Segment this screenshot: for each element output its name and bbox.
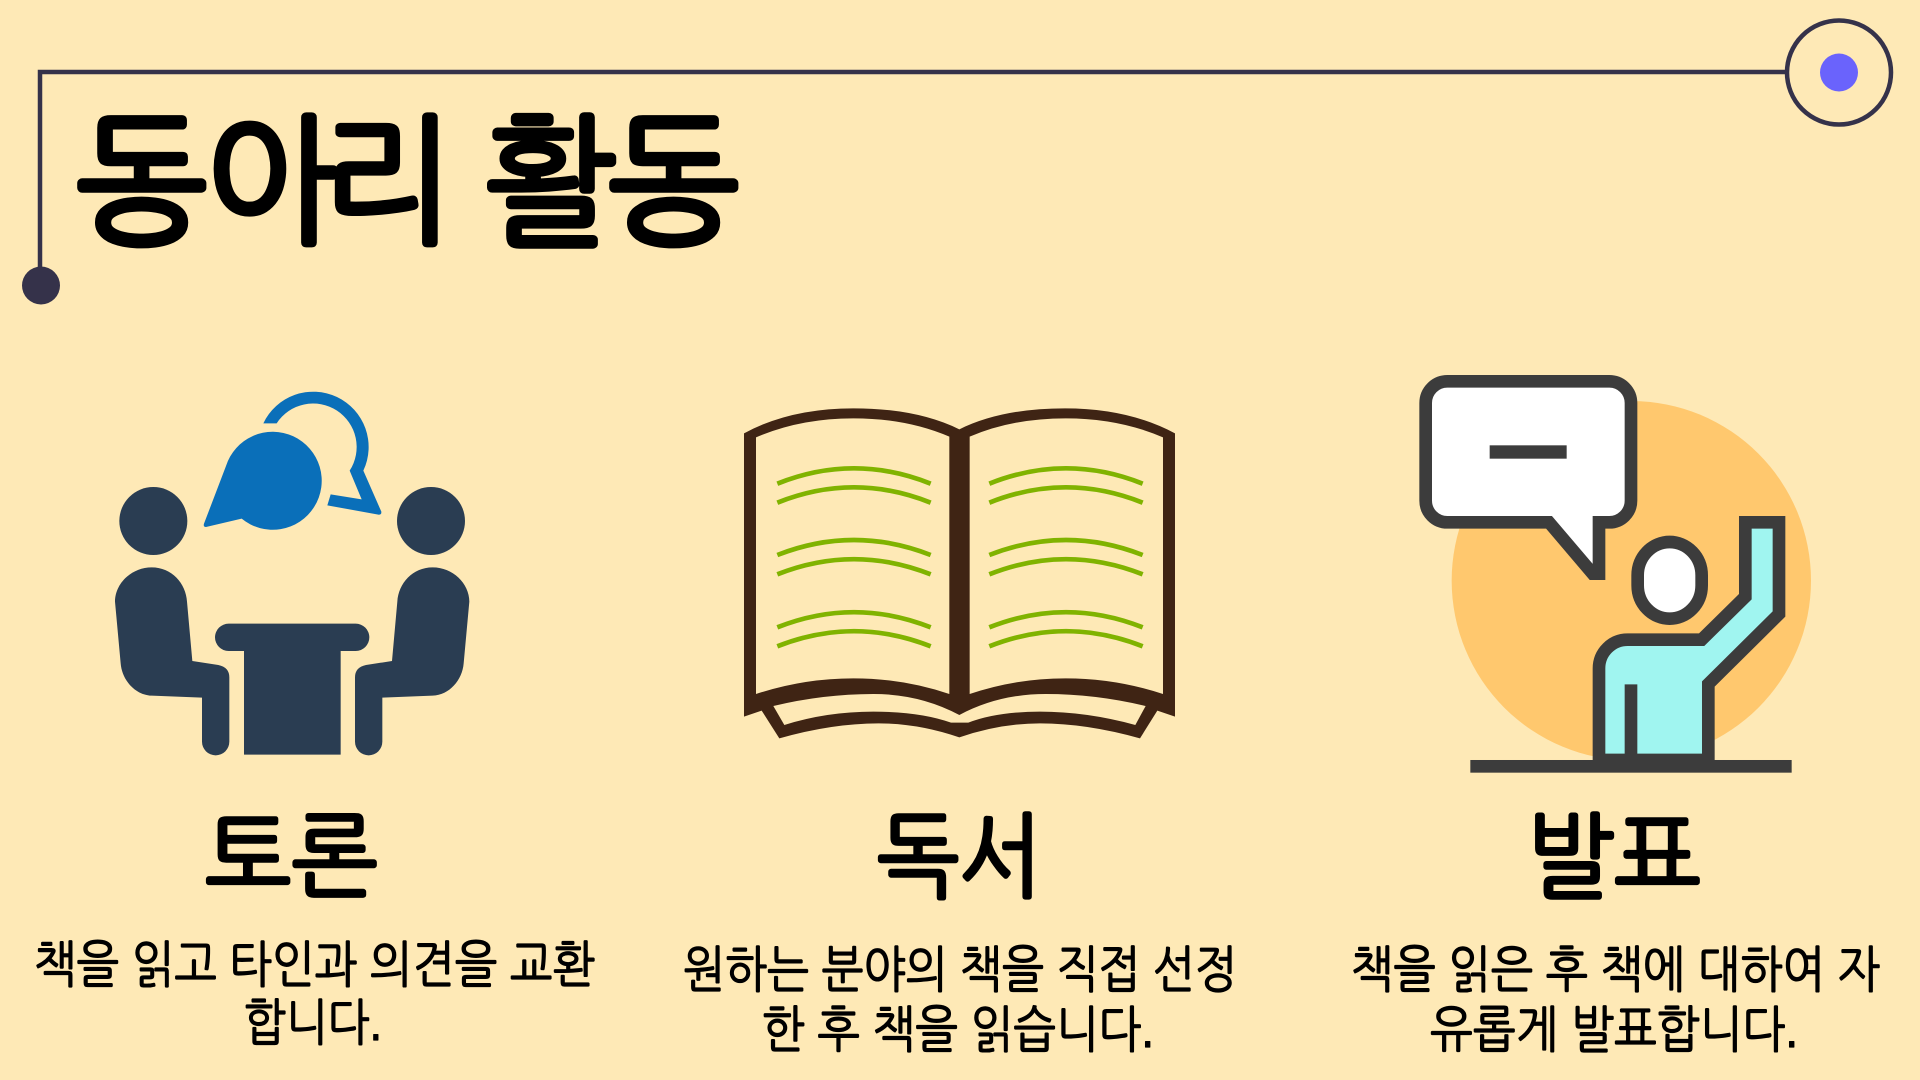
icon: discussion at table — [115, 392, 469, 755]
description: reading: 원하는 분야의 책을 직접 선정 — [683, 942, 1237, 998]
description: discussion: 합니다. — [244, 995, 382, 1051]
icon part: solid speech bubble — [204, 432, 322, 530]
description: presentation: 유롭게 발표합니다. — [1430, 1002, 1798, 1058]
icon: target circle top right — [1787, 20, 1891, 124]
icon part: ground bar — [1470, 760, 1792, 773]
icon part: orange circle — [1452, 401, 1811, 760]
heading: discussion: 토론 — [205, 807, 378, 909]
heading: reading: 독서 — [877, 807, 1042, 909]
icon part: people and table — [115, 487, 469, 755]
icon part: arm line — [1612, 684, 1650, 760]
heading: presentation: 발표 — [1527, 807, 1701, 909]
description: reading: 한 후 책을 읽습니다. — [762, 1002, 1154, 1058]
description: discussion — [34, 937, 595, 1051]
icon: open book — [744, 408, 1175, 738]
description: discussion: 책을 읽고 타인과 의견을 교환 — [34, 937, 595, 993]
header bracket line with end dot — [22, 72, 1785, 304]
icon part: book cover — [744, 408, 1175, 738]
icon part: person body — [1599, 522, 1779, 760]
icon: presenter raising hand — [1426, 381, 1811, 773]
icon part: speech bubble — [1426, 381, 1631, 574]
icon part: outline speech bubble — [263, 392, 381, 515]
description: presentation: 책을 읽은 후 책에 대하여 자 — [1351, 942, 1880, 998]
icon part: text lines — [777, 468, 1143, 646]
title: 동아리 활동 — [76, 104, 740, 261]
icon part: pages — [756, 418, 1163, 725]
icon part: speech dash — [1490, 445, 1567, 459]
icon part: head — [1638, 542, 1702, 619]
description: reading — [683, 942, 1237, 1058]
description: presentation — [1351, 942, 1880, 1058]
